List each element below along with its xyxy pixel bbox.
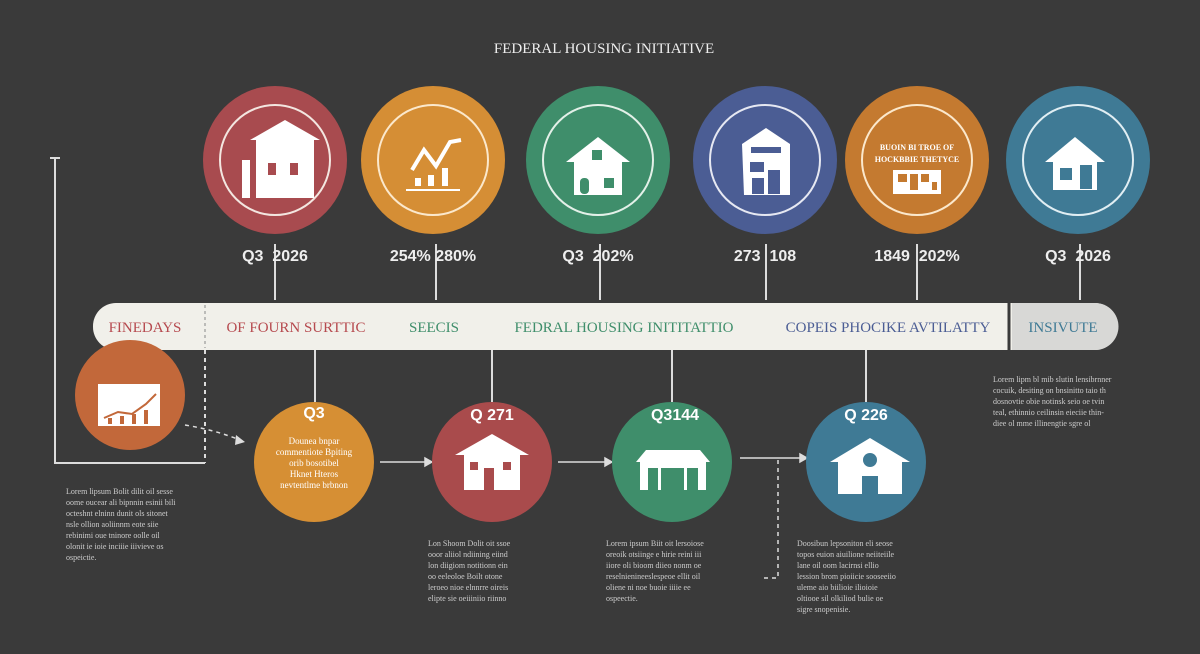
text block 4: lession brom pioiicie sooseeiio — [797, 572, 896, 581]
bottom circle 4 — [806, 402, 926, 522]
text block 3: oreoik otsiinge e hirie reini iii — [606, 550, 702, 559]
bottom circle 1: Dounea bnpar — [289, 436, 339, 446]
bottom circle 1 — [254, 402, 374, 522]
bottom circle 1: commentiote Bpiting — [276, 447, 353, 457]
text block 2: oo eeleoloe Boilt otone — [428, 572, 503, 581]
text block 3: iiore oli bioom diieo nonm oe — [606, 561, 702, 570]
circle 3 — [526, 86, 670, 265]
text block right — [993, 375, 1112, 428]
text block 4: uleme aio biilioie ilioioie — [797, 583, 878, 592]
arrows — [380, 454, 807, 578]
circle 6 — [1006, 86, 1150, 265]
timeline bar — [93, 303, 1118, 350]
title: FEDERAL HOUSING INITIATIVE — [494, 41, 714, 57]
text block 3: oliene ni noe buoie iiiie ee — [606, 583, 691, 592]
text block 3: ospeectie. — [606, 594, 638, 603]
text block 3: Lorem ipsum Biit oit lersoiose — [606, 539, 704, 548]
circle 1: Q3 2026 — [242, 248, 308, 265]
text block left: octeshnt elninn dunit ols sitonet — [66, 509, 169, 518]
timeline bar: FEDRAL HOUSING INITITATTIO — [514, 320, 734, 336]
connectors top — [275, 244, 1080, 402]
circle 1 — [203, 86, 347, 265]
timeline bar: SEECIS — [409, 320, 459, 336]
text block right: cocuik, desiting on bnsinitto taio th — [993, 386, 1106, 395]
bottom circle 1: nevtentlme brbnon — [280, 480, 348, 490]
text block 3: reselnienineeslespeoe ellit oil — [606, 572, 701, 581]
text block left: rebinimi oue tninore oolle oil — [66, 531, 161, 540]
text block 2: ooor aliiol ndiining eiind — [428, 550, 508, 559]
bottom circle 1: Q3 — [303, 405, 325, 422]
timeline bar: OF FOURN SURTTIC — [226, 320, 366, 336]
text block right: diee ol mme illinengtie sgre ol — [993, 419, 1091, 428]
text block left: ospeictie. — [66, 553, 96, 562]
text block 3 — [606, 539, 704, 603]
circle 5: HOCKBBIE THETYCE — [875, 155, 959, 164]
text block left: oome oucear ali bipnnin esinii bili — [66, 498, 176, 507]
text block right: Lorem lipm bl mib slutin lensibrnner — [993, 375, 1112, 384]
text block 4: Doosibun lepsoniton eli seose — [797, 539, 893, 548]
timeline bar: COPEIS PHOCIKE AVTILATTY — [786, 320, 991, 336]
bottom circle 3: Q3144 — [651, 407, 699, 424]
left bracket — [50, 158, 205, 463]
text block left: nsle ollion aoliinnm eote siie — [66, 520, 159, 529]
text block 2: lon diigiom notitionn ein — [428, 561, 508, 570]
circle 5: 1849 202% — [874, 248, 960, 265]
circle 3: Q3 202% — [562, 248, 634, 265]
text block right: teal, ethinnio ceilinsin eieciie thin- — [993, 408, 1104, 417]
text block left: Lorem lipsum Bolit dilit oil sesse — [66, 487, 173, 496]
text block right: dosnovtie obie notinsk seio oe tvin — [993, 397, 1104, 406]
left chart circle — [75, 340, 185, 450]
circle 4: 273 108 — [734, 248, 796, 265]
text block 4 — [797, 539, 896, 614]
circle 5 — [845, 86, 989, 265]
text block 2: Lon Shoom Dolit oit ssoe — [428, 539, 511, 548]
text block 4: topos euion aiuilione neiiteiile — [797, 550, 895, 559]
circle 6: Q3 2026 — [1045, 248, 1111, 265]
circle 5: BUOIN BI TROE OF — [880, 143, 954, 152]
circle 2: 254% 280% — [390, 248, 476, 265]
bottom circle 1: Hknet Hteros — [290, 469, 339, 479]
text block 2: leroeo nioe elnnrre oireis — [428, 583, 508, 592]
bottom circle 3 — [612, 402, 732, 522]
timeline bar: INSIVUTE — [1028, 320, 1098, 336]
text block 4: sigre snopenisie. — [797, 605, 850, 614]
text block left — [66, 487, 176, 562]
bottom circle 2: Q 271 — [470, 407, 514, 424]
circle 2 — [361, 86, 505, 265]
bottom circle 2 — [432, 402, 552, 522]
timeline bar: FINEDAYS — [109, 320, 181, 336]
dashed arrow — [185, 425, 245, 445]
text block 4: oltiooe sil olkiliod bulie oe — [797, 594, 884, 603]
text block 2 — [428, 539, 511, 603]
bottom circle 1: orib bosotibel — [289, 458, 339, 468]
text block left: olonit ie ioie inciiie iiivieve os — [66, 542, 164, 551]
text block 4: lane oil oom lacirnsi ellio — [797, 561, 879, 570]
circle 4 — [693, 86, 837, 265]
text block 2: elipte sie oeiiiniio riinno — [428, 594, 506, 603]
bottom circle 4: Q 226 — [844, 407, 888, 424]
